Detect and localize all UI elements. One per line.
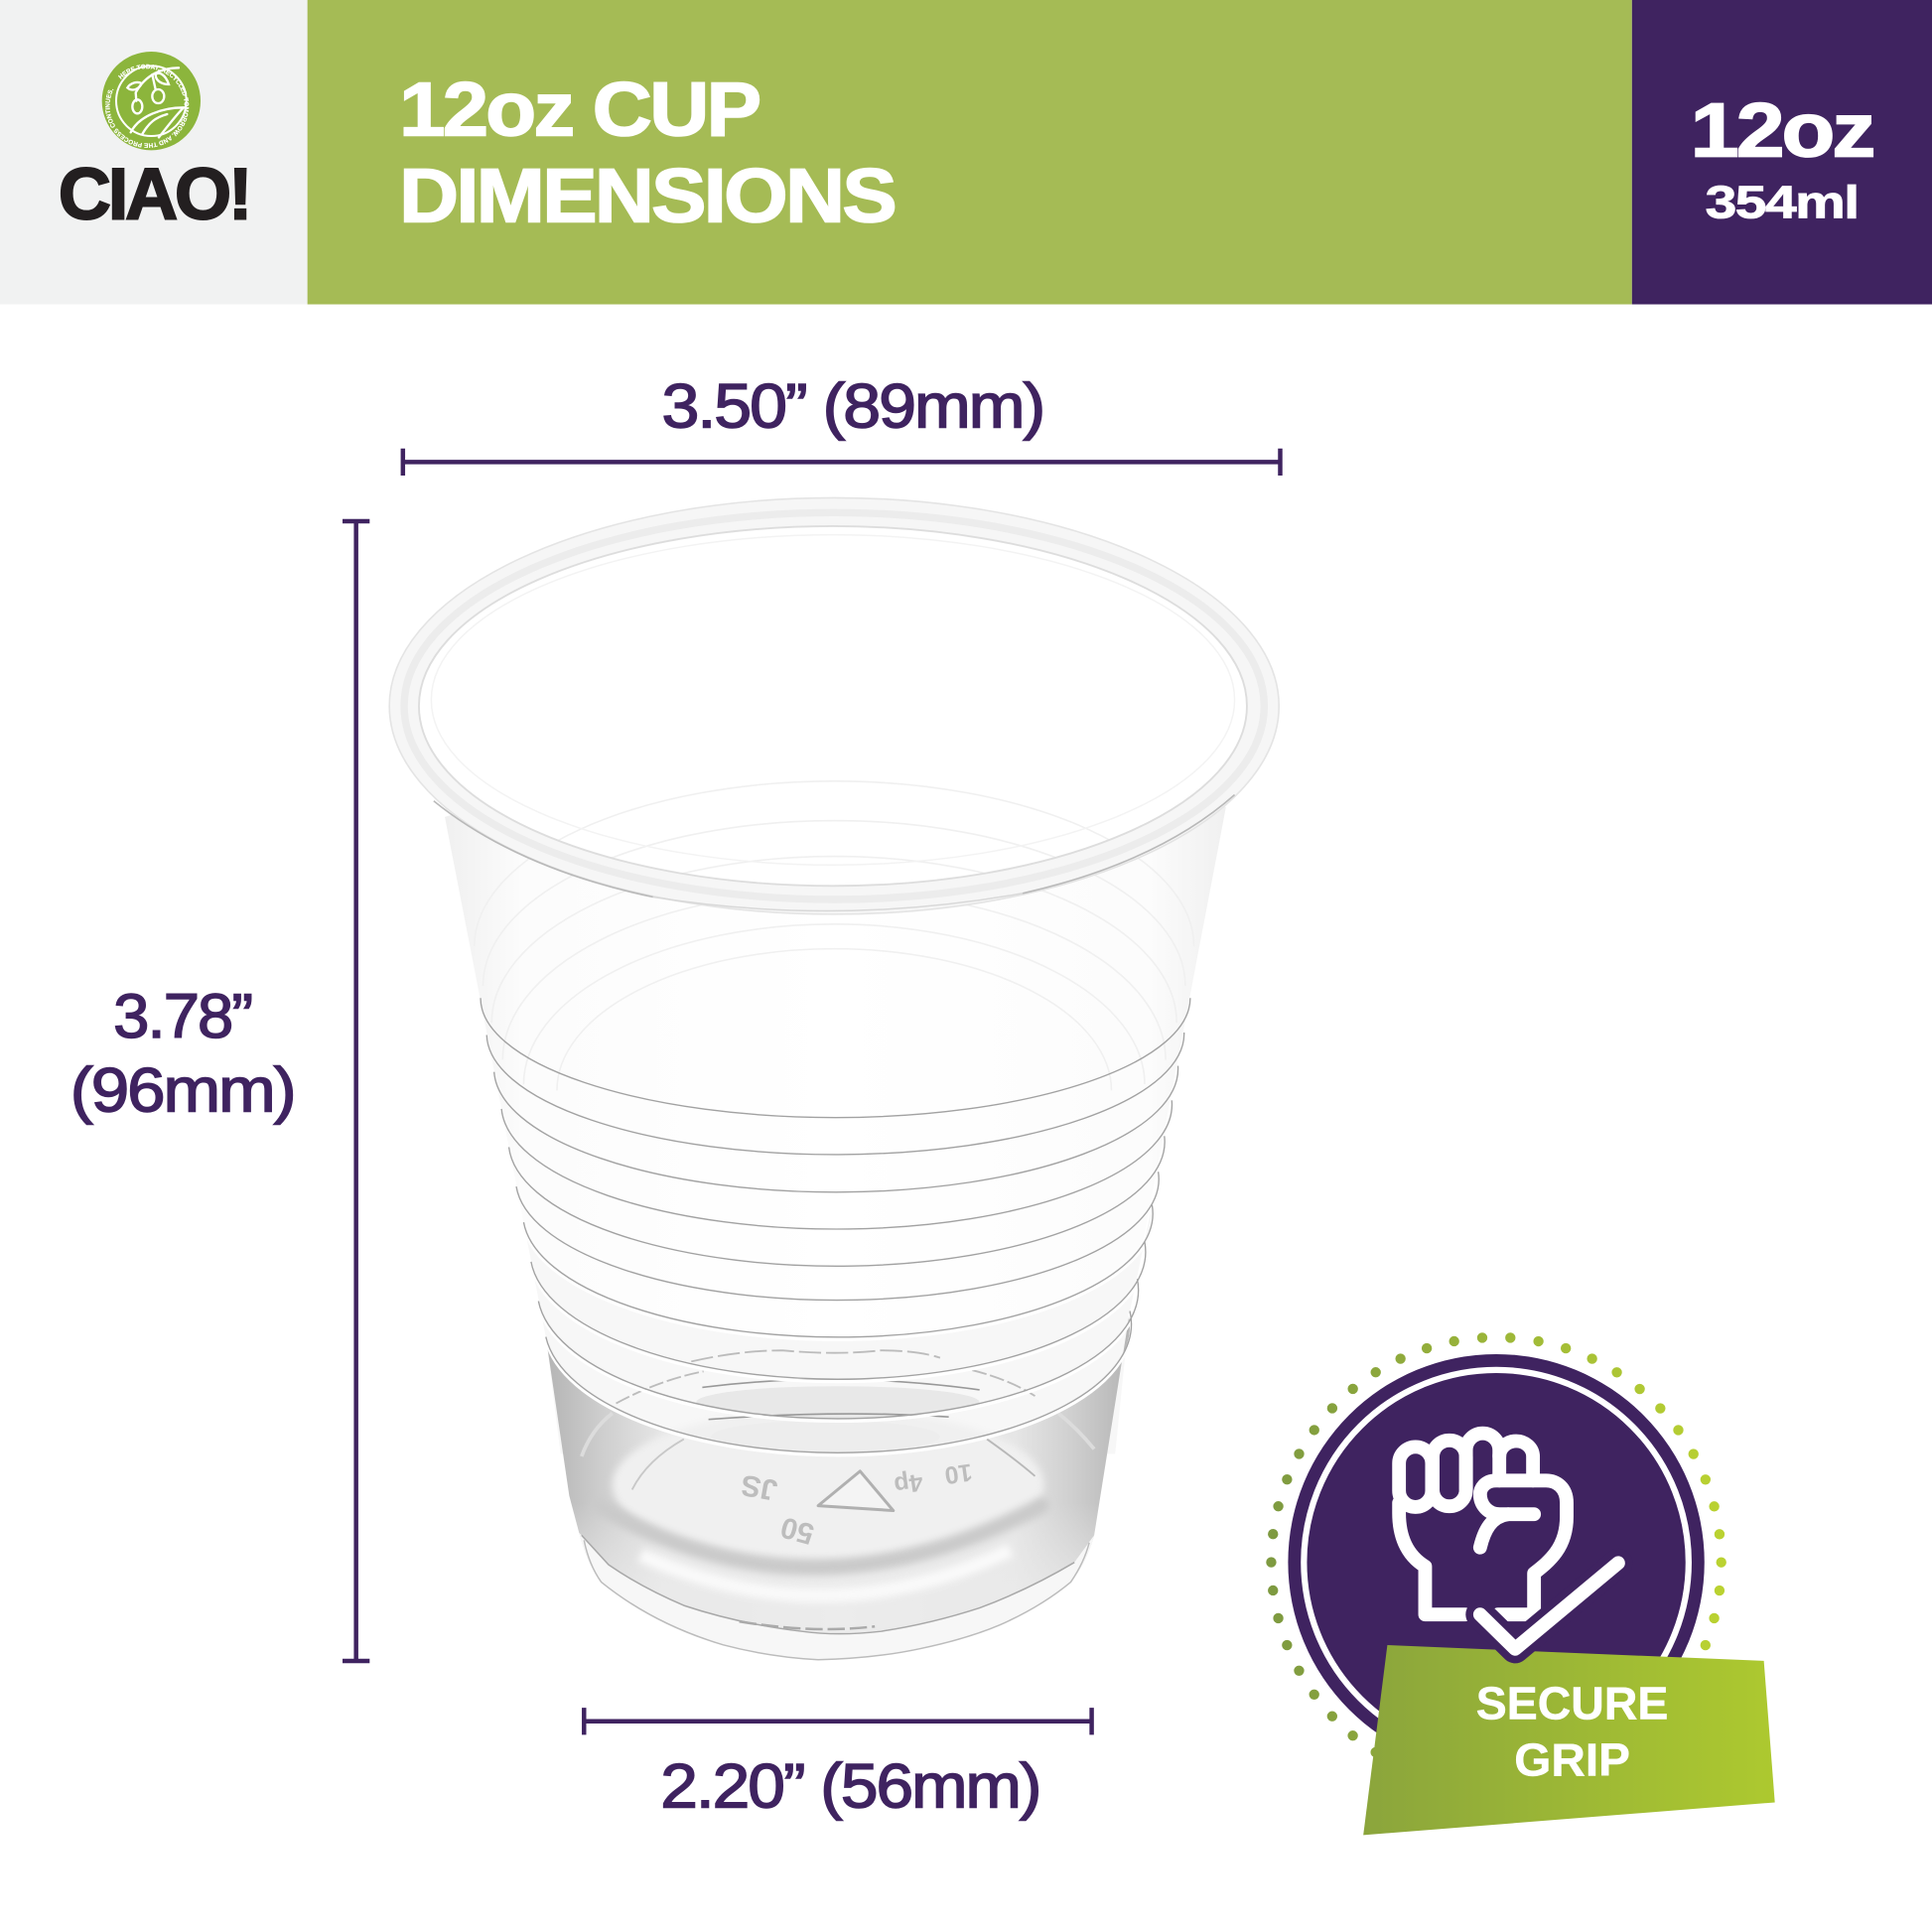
dotted ring xyxy=(1271,1337,1722,1787)
badge label: GRIP xyxy=(1514,1733,1630,1785)
embossed markings: 4p xyxy=(893,1467,924,1498)
logo: recycling seal: HERE TODAY, RECYCLED TOMORROW. AND THE PROCESS CONTINUES. xyxy=(105,64,189,148)
capacity: ounces: 12oz xyxy=(1691,88,1872,174)
dimension: top width: 3.50” (89mm) xyxy=(661,372,1043,442)
badge: secure grip xyxy=(1271,1337,1775,1835)
product: clear plastic cup xyxy=(389,497,1279,1660)
dimension: height xyxy=(70,521,369,1661)
badge label xyxy=(1476,1677,1668,1785)
panel: title background xyxy=(308,0,1632,305)
dimension: base width xyxy=(584,1708,1092,1822)
header band xyxy=(0,0,1932,305)
capacity: millilitres: 354ml xyxy=(1706,177,1859,228)
embossed markings xyxy=(739,1457,974,1551)
embossed recycling mark xyxy=(818,1471,894,1511)
dimension: height: 3.78” xyxy=(113,982,251,1051)
purple disc xyxy=(1288,1354,1705,1770)
dimension: base width: 2.20” (56mm) xyxy=(660,1752,1039,1822)
title xyxy=(399,68,895,238)
cup rim xyxy=(389,497,1279,914)
cup body xyxy=(445,751,1226,1660)
icon: fist xyxy=(1399,1434,1567,1614)
rib zone tint xyxy=(523,1205,1153,1453)
rib highlights xyxy=(523,1207,1153,1455)
title: DIMENSIONS xyxy=(399,153,895,238)
cup ribs xyxy=(481,998,1190,1452)
reflection lenses xyxy=(696,1386,980,1418)
embossed markings: 10 xyxy=(943,1457,974,1488)
dimension: height: (96mm) xyxy=(70,1055,295,1125)
panel: capacity background xyxy=(1632,0,1932,305)
cup base xyxy=(546,1311,1132,1660)
rim opening xyxy=(418,526,1248,886)
panel: logo background xyxy=(0,0,308,305)
crescent shadow xyxy=(599,1506,1041,1568)
icon: check mark xyxy=(1480,1563,1618,1649)
central disc xyxy=(613,1409,1043,1561)
title: 12oz CUP xyxy=(399,68,759,153)
bright band under disc xyxy=(640,1550,1011,1595)
embossed markings: 50 xyxy=(777,1510,817,1551)
badge label: SECURE xyxy=(1476,1677,1668,1728)
embossed markings: JS xyxy=(739,1468,780,1506)
refraction lines xyxy=(582,1350,1094,1489)
icon: check mark outline xyxy=(1480,1563,1618,1649)
white inner ring xyxy=(1304,1370,1689,1754)
dimension: top width xyxy=(403,372,1280,476)
banner xyxy=(1363,1645,1775,1835)
faint back-wall rings xyxy=(475,781,1194,1090)
logo: wordmark: CIAO! xyxy=(59,153,249,234)
bottom rim band xyxy=(579,1533,1094,1660)
